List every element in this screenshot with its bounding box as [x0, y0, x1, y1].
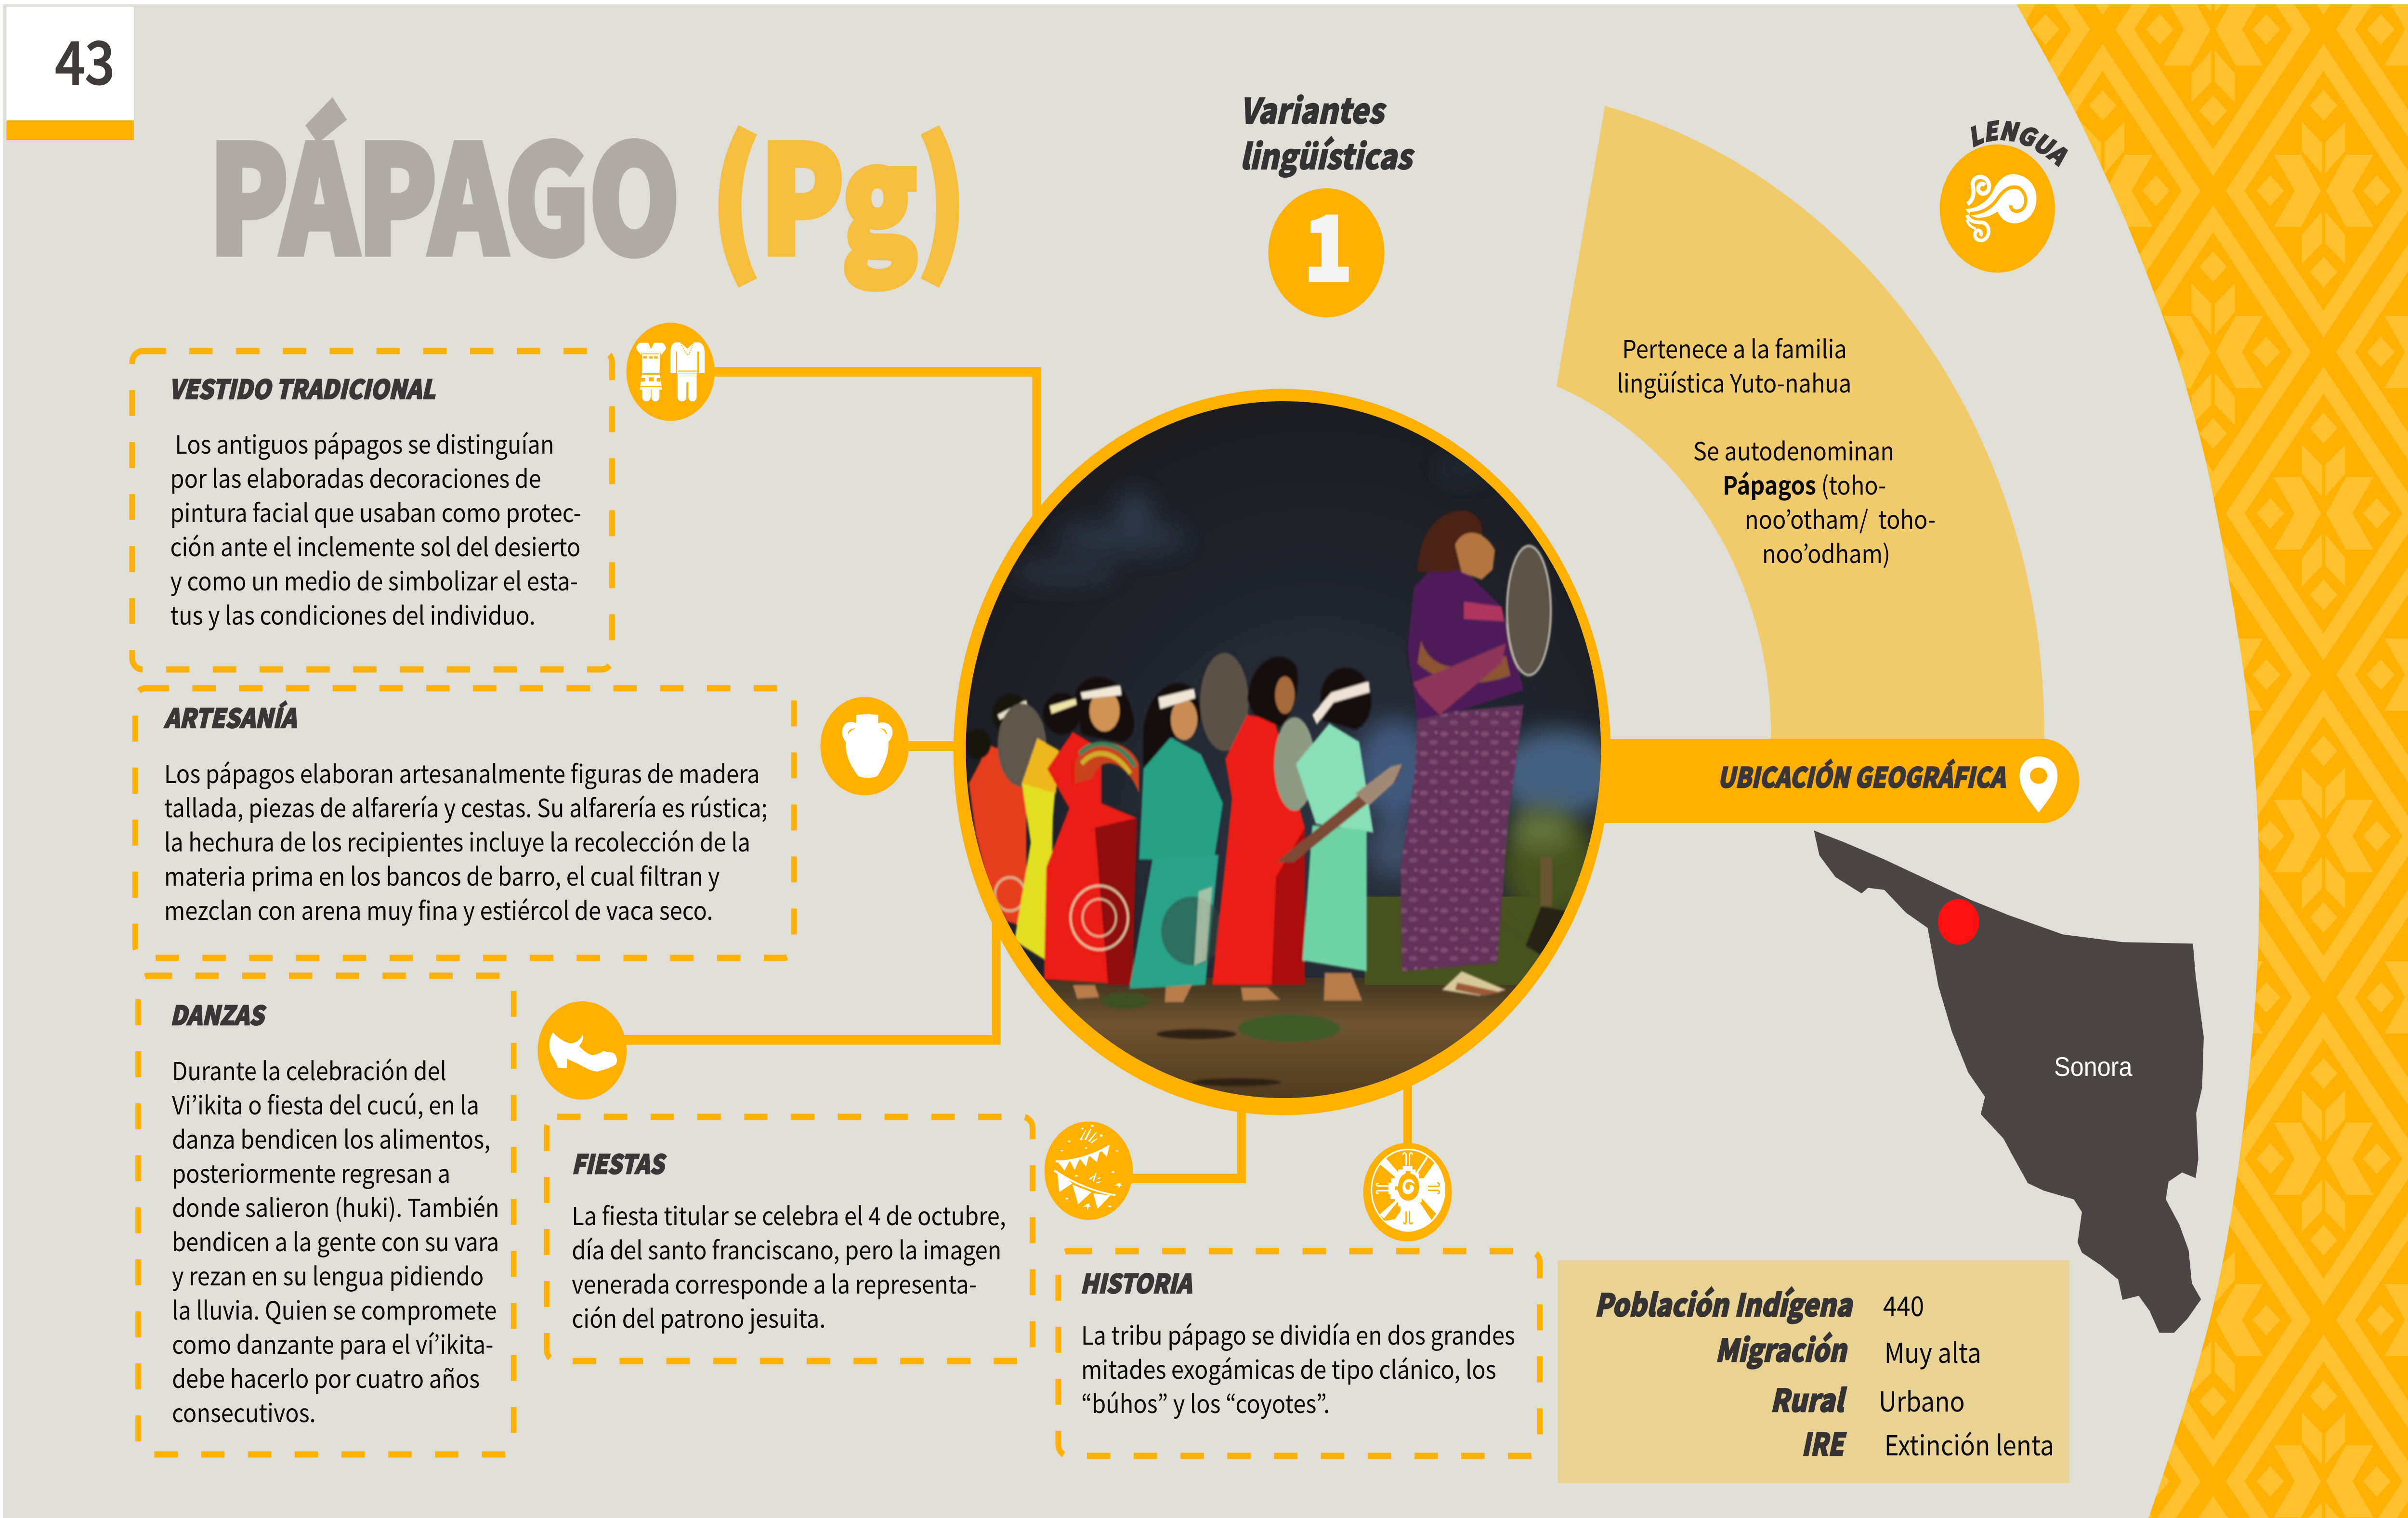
icon: glifo hunab ku	[1363, 1143, 1452, 1242]
figure: red dress	[1044, 732, 1137, 985]
panel: datos de población: Población Indígena	[1595, 1280, 1854, 1325]
figure: orange dress	[969, 745, 1026, 926]
vestido body text: por las elaboradas decoraciones de	[170, 459, 541, 496]
panel: datos de población: Extinción lenta	[1885, 1424, 2054, 1464]
figure: teal dress	[1139, 737, 1223, 860]
panel: artesanía: ARTESANÍA	[164, 697, 297, 735]
vestido body text: tus y las condiciones del individuo.	[170, 596, 536, 632]
panel: fiestas: FIESTAS	[572, 1143, 667, 1181]
danzas body text: debe hacerlo por cuatro años	[172, 1359, 480, 1396]
page number badge: 43	[55, 15, 115, 102]
historia body text	[1081, 1316, 1515, 1421]
danzas body text: como danzante para el ví’ikita-	[172, 1325, 493, 1361]
danzas body text: donde salieron (huki). También	[172, 1188, 499, 1225]
artesanía body text: Los pápagos elaboran artesanalmente figuras de madera	[164, 754, 760, 791]
artesanía body text: mezclan con arena muy fina y estiércol de vaca seco.	[164, 891, 713, 928]
map label: Sonora: Sonora	[2054, 1052, 2133, 1082]
variantes lingüísticas heading: Variantes	[1240, 84, 1387, 133]
variantes count badge	[1269, 177, 1385, 317]
fiestas body text: La fiesta titular se celebra el 4 de octubre,	[572, 1196, 1006, 1233]
panel: datos de población: Migración	[1715, 1325, 1848, 1371]
icon: lengua	[1940, 144, 2055, 273]
connector: vestido	[715, 372, 1036, 525]
panel: datos de población: IRE	[1802, 1419, 1847, 1465]
disc fan: gray	[1200, 653, 1249, 751]
lengua fan text: Se autodenominan	[1693, 432, 1894, 468]
panel: vestido tradicional: VESTIDO TRADICIONAL	[169, 368, 435, 406]
lengua curved label	[1971, 119, 2068, 168]
artesanía body text: tallada, piezas de alfarería y cestas. Su alfarería es rústica;	[164, 788, 768, 825]
panel: historia: HISTORIA	[1080, 1263, 1192, 1301]
fiestas body text: ción del patrono jesuita.	[572, 1299, 825, 1335]
panel: datos de población: 440	[1883, 1284, 1924, 1324]
vestido body text: ción ante el inclemente sol del desierto	[170, 527, 580, 564]
title: PÁPAGO	[209, 82, 680, 296]
decorative patterned band	[1975, 4, 2408, 1518]
historia body text: “búhos” y los “coyotes”.	[1081, 1384, 1330, 1421]
photo ground	[1043, 978, 1524, 1098]
panel: vestido tradicional	[132, 351, 612, 669]
variantes lingüísticas heading	[1240, 84, 1414, 179]
danzas body text: y rezan en su lengua pidiendo	[172, 1256, 484, 1293]
danzas body text: bendicen a la gente con su vara	[172, 1222, 499, 1259]
panel: danzas	[138, 976, 514, 1454]
photo circle: danza papago	[954, 389, 1621, 1115]
panel: datos de población: Muy alta	[1885, 1331, 1981, 1371]
historia body text: mitades exogámicas de tipo clánico, los	[1081, 1350, 1496, 1387]
danzas body text: posteriormente regresan a	[172, 1154, 450, 1191]
variantes lingüísticas heading: lingüísticas	[1240, 130, 1414, 179]
title: (Pg)	[711, 82, 967, 296]
danzas body text: danza bendicen los alimentos,	[172, 1120, 490, 1156]
artesanía body text	[164, 754, 768, 928]
connector: fiestas	[1131, 1098, 1242, 1178]
icon: vasija	[820, 697, 909, 795]
figure: red dress 2	[1212, 715, 1305, 985]
panel: datos de población	[1557, 1260, 2069, 1483]
panel: historia	[1058, 1251, 1540, 1456]
map: sonora	[1814, 830, 2204, 1333]
connector: historia	[1403, 1084, 1413, 1151]
figure: light teal dress	[1274, 717, 1315, 811]
icon: fiesta	[1045, 1122, 1133, 1220]
lengua fan text	[1617, 329, 1936, 571]
lengua fan text: lingüística Yuto-nahua	[1617, 364, 1851, 400]
vestido body text: Los antiguos pápagos se distinguían	[175, 425, 554, 461]
vestido body text: y como un medio de simbolizar el esta-	[170, 562, 578, 598]
lengua fan text: noo’odham)	[1762, 534, 1890, 571]
lengua fan text: Pápagos (toho-	[1723, 466, 1886, 502]
ubicación geográfica pill	[1581, 739, 2079, 823]
figure: adult woman	[1400, 705, 1524, 971]
historia body text: La tribu pápago se dividía en dos grandes	[1081, 1316, 1515, 1352]
danzas body text: Durante la celebración del	[172, 1051, 446, 1088]
fiestas body text: día del santo franciscano, pero la imagen	[572, 1230, 1001, 1267]
icon: zapato	[537, 1001, 627, 1099]
lengua fan text: Pertenece a la familia	[1622, 329, 1847, 366]
ubicación geográfica pill: UBICACIÓN GEOGRÁFICA	[1717, 756, 2006, 796]
fiestas body text	[572, 1196, 1006, 1335]
variantes count badge: 1	[1304, 177, 1353, 307]
figure feet	[1073, 973, 1362, 1002]
icon: location pin	[2020, 757, 2057, 813]
vestido body text	[170, 425, 581, 632]
danzas body text	[172, 1051, 499, 1430]
vestido body text: pintura facial que usaban como protec-	[170, 493, 581, 530]
lengua fan text: noo’otham/ toho-	[1745, 500, 1936, 537]
icon: vestido	[627, 323, 715, 421]
panel: datos de población: Rural	[1770, 1375, 1847, 1421]
connector: artesania	[909, 741, 966, 751]
page number badge	[6, 7, 134, 140]
connector: danzas	[624, 915, 996, 1040]
fiestas body text: venerada corresponde a la representa-	[572, 1265, 977, 1301]
danzas body text: la lluvia. Quien se compromete	[172, 1291, 497, 1327]
artesanía body text: la hechura de los recipientes incluye la recolección de la	[164, 823, 750, 859]
panel: datos de población: Urbano	[1879, 1380, 1965, 1420]
panel: artesanía	[135, 688, 794, 958]
artesanía body text: materia prima en los bancos de barro, el cual filtran y	[164, 857, 720, 893]
danzas body text: consecutivos.	[172, 1393, 316, 1430]
lengua curved label: LENGUA	[1971, 119, 2068, 168]
panel: danzas: DANZAS	[170, 995, 267, 1033]
danzas body text: Vi’ikita o fiesta del cucú, en la	[172, 1086, 479, 1122]
lengua fan panel	[1557, 106, 2044, 744]
figure: yellow dress	[1014, 782, 1057, 961]
panel: fiestas	[547, 1117, 1033, 1361]
